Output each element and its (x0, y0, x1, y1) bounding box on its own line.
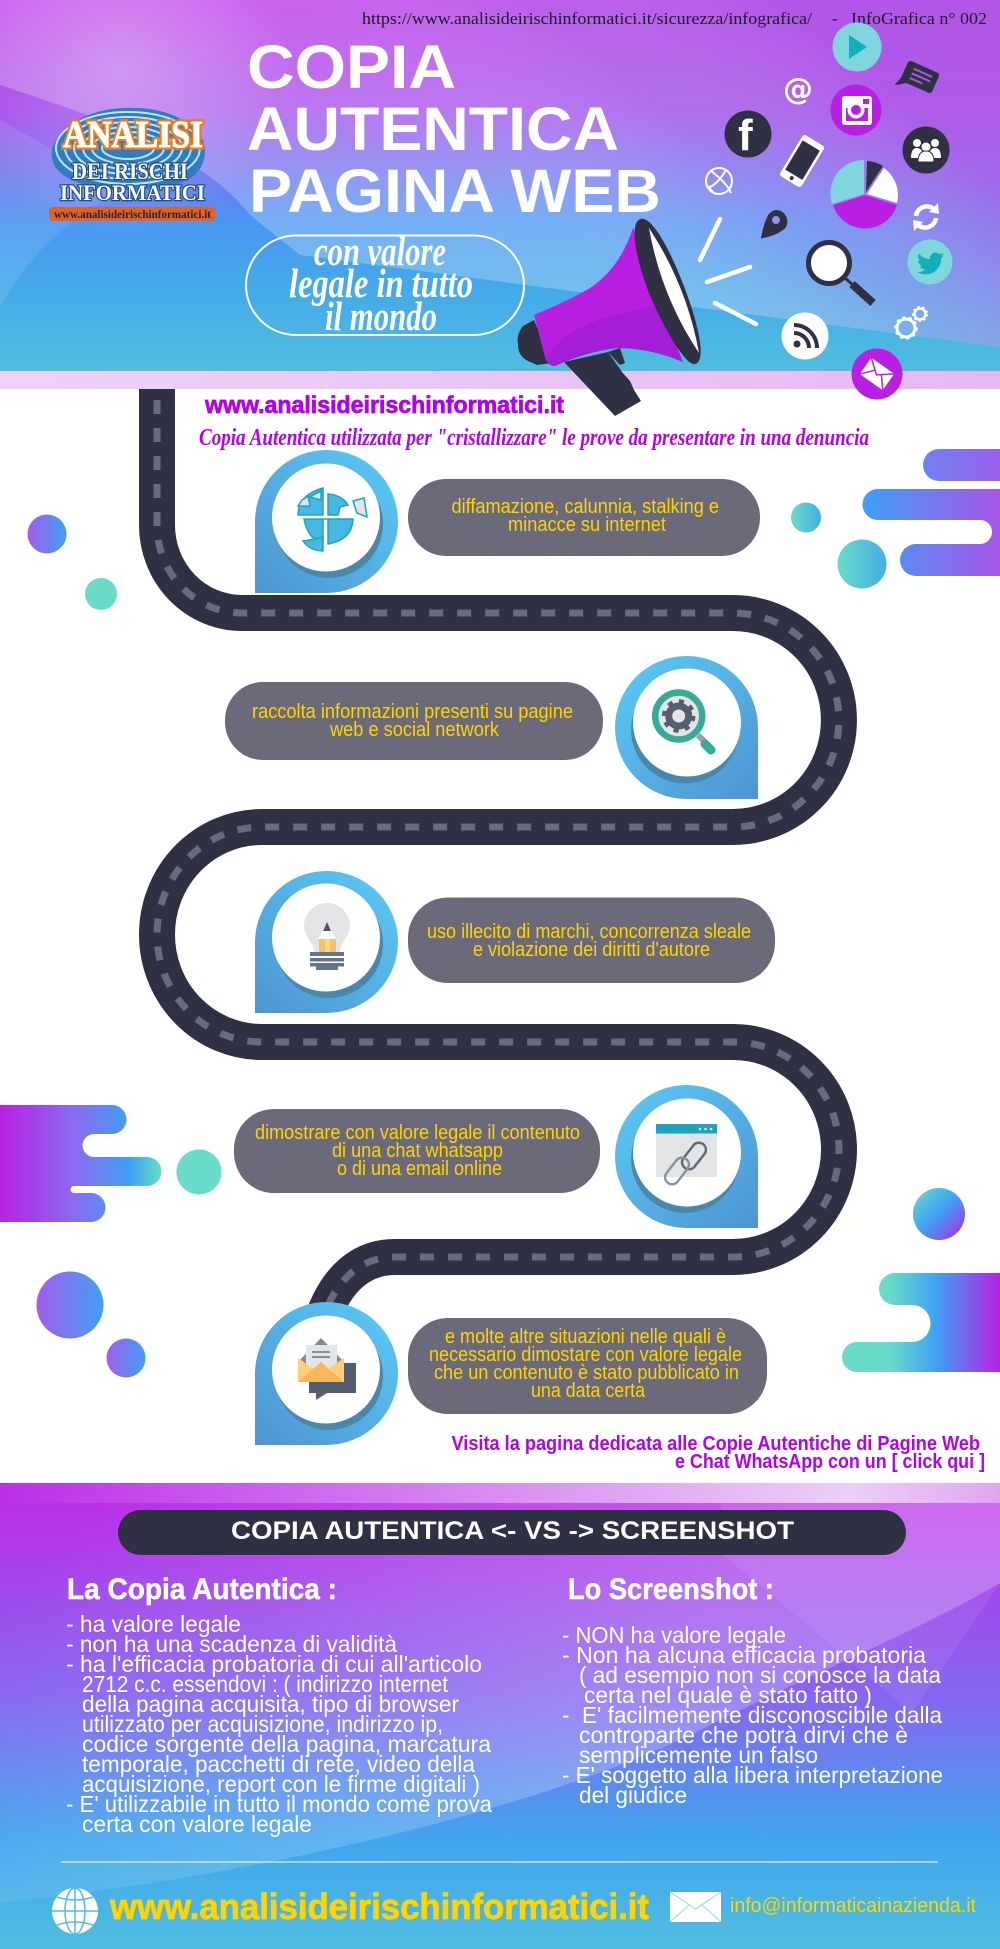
heading: La Copia Autentica : (67, 1573, 337, 1606)
icon: gear magnifier (655, 692, 711, 750)
callout: e violazione dei diritti d'autore (473, 939, 710, 961)
step 4 (234, 1085, 758, 1228)
icon: chat bubble (894, 59, 940, 100)
icon: map pin (761, 210, 787, 238)
callout: necessario dimostare con valore legale (429, 1344, 742, 1366)
subtitle pill: il mondo (325, 293, 437, 339)
source url line: - (832, 9, 838, 28)
list: - NON ha valore legale (562, 1622, 786, 1648)
callout (408, 898, 775, 983)
callout: minacce su internet (508, 514, 666, 536)
source url line: https://www.analisideirischinformatici.it/sicurezza/infografica/ (362, 9, 812, 28)
callout: o di una email online (337, 1158, 502, 1180)
list: - Non ha alcuna efficacia probatoria (562, 1642, 926, 1668)
callout (408, 1318, 767, 1414)
icon: twitter (908, 240, 952, 284)
list: - E' soggetto alla libera interpretazione (562, 1762, 943, 1788)
icon: gears (896, 307, 927, 338)
list (562, 1622, 943, 1808)
callout: diffamazione, calunnia, stalking e (452, 496, 719, 518)
rear cap (518, 320, 552, 365)
icon: magnifier (808, 242, 873, 303)
list: certa nel quale è stato fatto ) (584, 1682, 872, 1708)
logo wordmark: ANALISI (63, 114, 203, 156)
logo wordmark: INFORMATICI (60, 180, 205, 205)
icon: link window (656, 1124, 717, 1187)
callout (408, 479, 760, 556)
subtitle pill: con valore (314, 228, 446, 274)
horn rim (625, 213, 710, 371)
footer email: info@informaticainazienda.it (730, 1895, 976, 1917)
comparison banner: COPIA AUTENTICA <- VS -> SCREENSHOT (231, 1517, 794, 1545)
callout: una data certa (531, 1380, 646, 1402)
icon: mail chat (298, 1338, 356, 1400)
callout: raccolta informazioni presenti su pagine (252, 701, 573, 723)
website heading: www.analisideirischinformatici.it (204, 392, 564, 419)
pin (255, 450, 398, 593)
icon: instagram (830, 84, 882, 136)
list: della pagina acquisita, tipo di browser (82, 1691, 459, 1717)
logo wordmark (60, 114, 205, 205)
decorative blobs (0, 449, 1000, 1378)
title (247, 33, 661, 225)
icon: refresh (913, 203, 939, 231)
step 5 (255, 1302, 767, 1445)
icon: dribbble (706, 168, 732, 194)
list: - non ha una scadenza di validità (66, 1631, 397, 1657)
icon: facebook (724, 110, 772, 160)
visit link text (452, 1433, 985, 1473)
list: acquisizione, report con le firme digitali ) (82, 1771, 480, 1797)
step 1 (255, 450, 760, 593)
pin (255, 871, 398, 1013)
pin (255, 1302, 398, 1445)
heading: Lo Screenshot : (568, 1573, 774, 1606)
horn opening (649, 228, 699, 353)
trigger (608, 348, 625, 365)
horn (534, 228, 683, 366)
icon: bulb pencil (304, 903, 350, 970)
icon: people (902, 126, 950, 174)
list: semplicemente un falso (579, 1742, 818, 1768)
logo url bar: www.analisideirischinformatici.it (54, 207, 211, 221)
title: AUTENTICA (247, 95, 619, 163)
subtitle pill (246, 228, 524, 339)
logo wordmark: ANALISI (63, 114, 203, 156)
callout: che un contenuto è stato pubblicato in (434, 1362, 739, 1384)
header background (0, 0, 1000, 389)
logo wordmark: DEI RISCHI (72, 159, 188, 184)
panel: screenshot (562, 1573, 943, 1808)
list: ( ad esempio non si conosce la data (579, 1662, 941, 1688)
list: 2712 c.c. essendovi : ( indirizzo internet (82, 1671, 449, 1697)
pin (615, 656, 758, 799)
icon: footer globe (52, 1888, 98, 1934)
icon: play (832, 22, 882, 72)
title: PAGINA WEB (249, 157, 661, 225)
callout: uso illecito di marchi, concorrenza sleale (427, 921, 751, 943)
handle (564, 352, 641, 416)
list: - ha valore legale (66, 1611, 241, 1637)
icon: facebook: f (738, 111, 753, 160)
list: del giudice (579, 1782, 687, 1808)
footer website: www.analisideirischinformatici.it (109, 1886, 649, 1927)
bottom panel background (0, 1483, 1000, 1949)
source url line: InfoGrafica n° 002 (851, 9, 987, 28)
comparison banner (118, 1510, 906, 1555)
list: temporale, pacchetti di rete, video della (82, 1751, 475, 1777)
pin (615, 1085, 758, 1228)
callout: web e social network (329, 719, 500, 741)
list: certa con valore legale (82, 1811, 312, 1837)
callout (225, 682, 603, 760)
icon: phone (779, 134, 825, 188)
road (157, 389, 839, 1312)
list: - ha l'efficacia probatoria di cui all'articolo (66, 1651, 482, 1677)
logo (49, 108, 215, 221)
callout (234, 1109, 600, 1193)
callout: e molte altre situazioni nelle quali è (445, 1326, 726, 1348)
panel: copia autentica (66, 1573, 492, 1837)
horn shade (545, 307, 683, 366)
source url line (362, 9, 987, 28)
subtitle pill: legale in tutto (289, 260, 473, 306)
icon: envelope badge (852, 348, 902, 400)
list (66, 1611, 492, 1837)
callout: dimostrare con valore legale il contenuto (255, 1122, 580, 1144)
step 2 (225, 656, 758, 799)
list: controparte che potrà dirvi che è (579, 1722, 908, 1748)
icon: footer envelope (670, 1892, 721, 1922)
list: utilizzato per acquisizione, indirizzo ip, (82, 1711, 443, 1737)
callout: di una chat whatsapp (332, 1140, 503, 1162)
icon: globe (298, 488, 367, 551)
list: codice sorgente della pagina, marcatura (82, 1731, 491, 1757)
sound rays (700, 219, 756, 324)
megaphone (518, 213, 756, 416)
list: - E' utilizzabile in tutto il mondo come prova (66, 1791, 492, 1817)
fingerprint (52, 108, 205, 190)
step 3 (255, 871, 775, 1013)
list: - E' facilmemente disconoscibile dalla (562, 1702, 942, 1728)
icon: rss (782, 312, 828, 360)
icon: pie chart (830, 160, 898, 229)
icon: at sign: @ (783, 72, 813, 107)
title: COPIA (247, 33, 456, 101)
